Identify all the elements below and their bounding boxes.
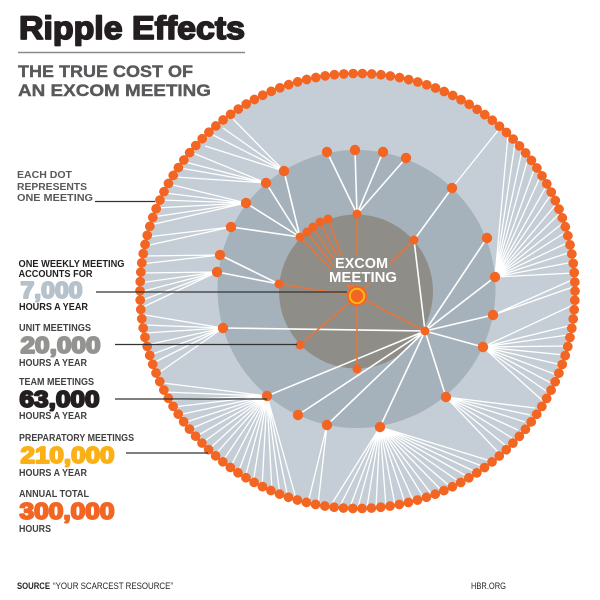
stat: team meetings 63,000 (19, 377, 267, 422)
middle disc: team meetings (218, 150, 496, 428)
icon: EXCOM centre dot (347, 286, 367, 306)
stat: unit meetings 20,000: UNIT MEETINGS (19, 323, 91, 334)
title: Ripple Effects (19, 10, 245, 46)
inner disc: unit meetings (279, 214, 433, 368)
stat: annual total 300,000: HOURS (19, 524, 51, 535)
inner ring dots (274, 210, 430, 374)
EXCOM meeting label (329, 256, 397, 286)
stat: weekly meeting 7,000: HOURS A YEAR (19, 302, 89, 313)
EXCOM meeting label: EXCOM (335, 256, 388, 272)
ripple diagram (139, 74, 575, 508)
stat: team meetings 63,000: TEAM MEETINGS (19, 377, 94, 388)
stat: annual total 300,000 (19, 489, 114, 535)
stat: preparatory meetings 210,000 (19, 433, 208, 479)
credit: HBR.ORG (471, 581, 506, 591)
subtitle: AN EXCOM MEETING (18, 81, 211, 100)
callout: each dot: REPRESENTS (17, 182, 87, 193)
source (17, 581, 173, 591)
source: SOURCE (17, 581, 50, 591)
stat: weekly meeting 7,000: 7,000 (20, 277, 82, 303)
stat: preparatory meetings 210,000: HOURS A YEAR (19, 468, 88, 479)
stat: unit meetings 20,000: 20,000 (20, 332, 100, 358)
orange lines from EXCOM meeting (279, 214, 425, 369)
stat: annual total 300,000: ANNUAL TOTAL (19, 489, 89, 500)
callout: each dot: ONE MEETING (17, 193, 93, 204)
callout: each dot: EACH DOT (17, 170, 72, 181)
stat: preparatory meetings 210,000: 210,000 (20, 442, 114, 468)
stat: weekly meeting 7,000: ONE WEEKLY MEETING (18, 259, 125, 270)
subtitle (18, 62, 211, 100)
stat: weekly meeting 7,000: ACCOUNTS FOR (18, 269, 93, 280)
source: “YOUR SCARCEST RESOURCE” (53, 581, 173, 591)
stat: unit meetings 20,000: HOURS A YEAR (19, 358, 88, 369)
middle ring dots (212, 145, 500, 432)
EXCOM meeting label: MEETING (329, 270, 397, 286)
stat: weekly meeting 7,000 (18, 259, 347, 313)
white connecting lines to outer dots (139, 119, 574, 507)
stat: annual total 300,000: 300,000 (20, 498, 114, 524)
outer disc: preparatory meetings (142, 76, 572, 506)
subtitle: THE TRUE COST OF (18, 62, 193, 81)
white connecting lines to middle dots (217, 150, 495, 427)
stat: team meetings 63,000: 63,000 (20, 386, 100, 412)
stat: team meetings 63,000: HOURS A YEAR (19, 411, 88, 422)
stat: unit meetings 20,000 (19, 323, 297, 369)
outer ring of meeting dots (140, 74, 575, 508)
callout: each dot (17, 170, 155, 204)
stat: preparatory meetings 210,000: PREPARATORY MEETINGS (19, 433, 134, 444)
